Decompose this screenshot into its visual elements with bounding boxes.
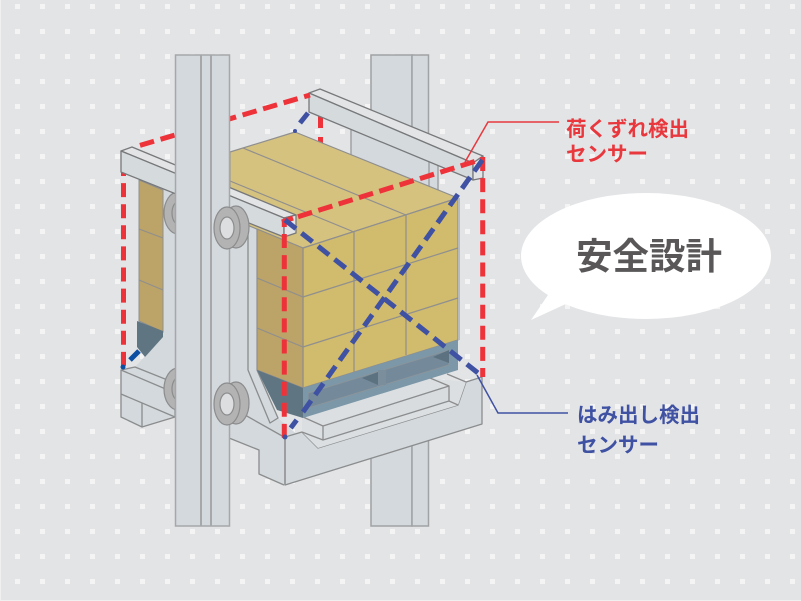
- rear left wheels: [164, 192, 192, 410]
- lower front wheel: [214, 382, 249, 425]
- red leader line: [465, 122, 559, 162]
- blue leader line: [477, 375, 568, 413]
- red sensor label: 荷くずれ検出: [566, 118, 689, 141]
- back column: [371, 55, 428, 526]
- upper front wheel: [214, 206, 249, 249]
- back left red sensor upright: [318, 116, 323, 145]
- red sensor label: センサー: [566, 143, 648, 166]
- bubble title: 安全設計: [576, 236, 722, 277]
- blue sensor dashed lines: [120, 113, 483, 440]
- cargo stack: [230, 132, 459, 388]
- left rear frame: [121, 175, 175, 427]
- back top beam: [309, 89, 483, 180]
- blue sensor label: センサー: [577, 434, 659, 457]
- front red sensor lines: [282, 159, 482, 438]
- right side frame and bracket: [229, 200, 300, 485]
- speech bubble: [521, 193, 771, 320]
- front column: [176, 55, 230, 526]
- blue sensor label: はみ出し検出: [577, 404, 700, 427]
- pallet: [257, 340, 458, 418]
- left cargo side: [137, 180, 163, 357]
- red sensor dashed lines behind beam: [124, 95, 483, 377]
- base platform: [285, 374, 482, 485]
- front beam: [121, 147, 296, 237]
- back support under top beam: [351, 125, 438, 200]
